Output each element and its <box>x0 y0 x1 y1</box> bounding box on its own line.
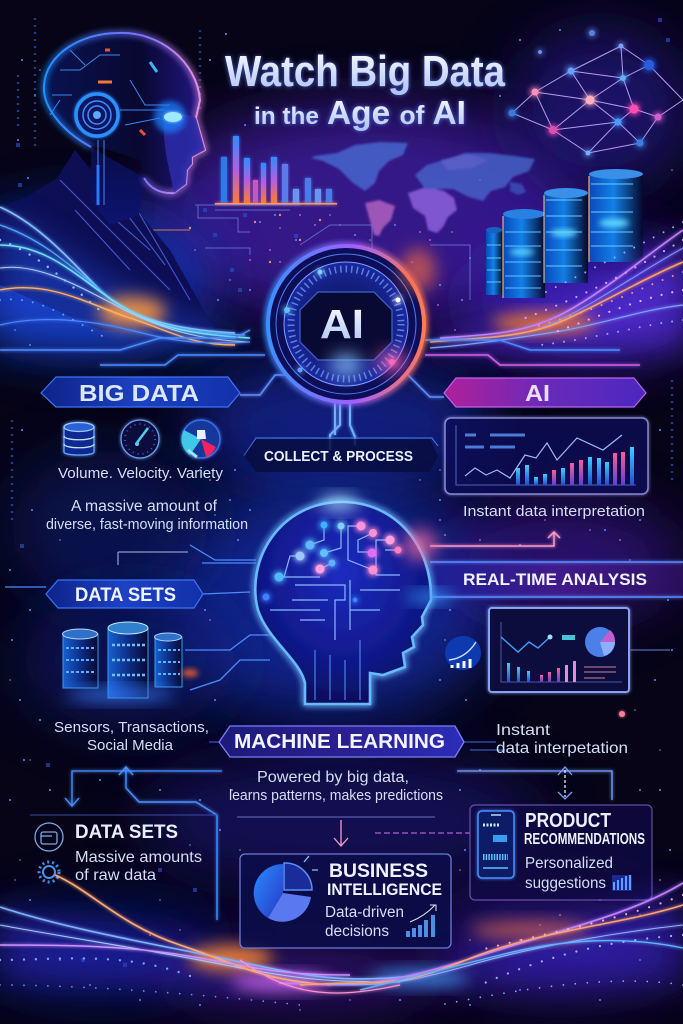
banner: AI <box>444 378 646 407</box>
text: sensors: Social Media <box>87 737 174 754</box>
banner: Big Data: BIG DATA <box>79 380 199 406</box>
server 2 <box>544 188 588 283</box>
eye <box>154 101 186 133</box>
server 3 <box>503 209 545 298</box>
lower flowing light waves <box>0 875 683 1005</box>
icon: database trio <box>62 622 182 698</box>
dotted particle rows <box>0 222 683 345</box>
chip core <box>300 292 392 360</box>
circuit traces under bar chart <box>150 205 470 300</box>
icon: gauge <box>121 420 159 458</box>
arrow: to product recommendations <box>457 767 612 800</box>
icon: gear <box>39 862 59 882</box>
small growth chart badge <box>445 636 481 670</box>
circuit lines on skull <box>50 50 170 205</box>
text: instant interpretation: Instant data interpretation <box>463 503 645 520</box>
banner: Data Sets: DATA SETS <box>75 585 176 606</box>
server 4 <box>486 227 503 295</box>
dashboard bars <box>507 661 576 682</box>
left data streams <box>12 18 672 520</box>
panel: business intelligence: Data-driven <box>325 904 404 921</box>
brain connector traces <box>5 545 275 690</box>
red accent streak <box>540 711 640 717</box>
head <box>44 33 205 193</box>
chip nodes <box>284 270 400 372</box>
text: sensors: Sensors, Transactions, <box>54 719 209 736</box>
dotted particle rows <box>0 895 683 1005</box>
icon: storage badge <box>35 823 63 851</box>
text: machine learning description: Powered by big data, <box>257 769 409 786</box>
panel: business intelligence: decisions <box>325 923 389 940</box>
panel: product recommendations: suggestions <box>525 875 606 892</box>
server stack <box>486 169 643 298</box>
brain nodes <box>262 522 402 602</box>
text: big data description: diverse, fast-moving information <box>46 516 248 533</box>
band: real-time analysis <box>430 562 683 597</box>
icon: mini bars <box>612 875 632 891</box>
banner: AI: AI <box>525 380 550 406</box>
arrow: up to AI <box>430 532 560 546</box>
brain head <box>255 502 431 704</box>
android figure <box>0 33 215 330</box>
connector: chip to brain <box>338 473 340 505</box>
text: instant data interpetation: data interpetation <box>496 740 628 757</box>
panel: data sets: of raw data <box>75 867 156 884</box>
panel: collect and process <box>244 438 438 473</box>
panel: business intelligence: INTELLIGENCE <box>327 880 442 899</box>
cylinder middle <box>108 622 148 698</box>
dashboard line <box>501 637 550 652</box>
text: instant data interpetation: Instant <box>496 722 551 739</box>
head rim light <box>44 33 205 193</box>
panel: product recommendations <box>470 805 652 900</box>
panel: real-time dashboard <box>489 608 629 692</box>
text: three Vs: Volume. Velocity. Variety <box>58 465 224 482</box>
banner: Data Sets <box>46 580 203 608</box>
panel: data sets <box>30 815 217 884</box>
title <box>225 47 505 131</box>
chip label: AI <box>320 301 364 347</box>
banner: Big Data <box>41 377 240 407</box>
neck <box>91 147 144 225</box>
haze under waves <box>0 215 235 350</box>
icon: growth bars <box>408 905 436 937</box>
title line 2: in the Age of AI <box>254 94 466 131</box>
band: real-time analysis: REAL-TIME ANALYSIS <box>463 570 647 589</box>
text: machine learning description: learns patterns, makes predictions <box>229 788 443 804</box>
chart labels <box>465 435 525 447</box>
text: big data description <box>46 498 248 533</box>
server 1 <box>589 169 643 262</box>
panel: AI analytics chart <box>445 418 648 494</box>
arrow: up from data sets panel <box>119 767 217 920</box>
network graph <box>508 30 683 156</box>
world map <box>311 142 535 236</box>
upper flowing light waves <box>0 207 683 350</box>
brain traces <box>270 525 400 700</box>
bar chart <box>215 136 337 204</box>
text: sensors <box>54 719 209 754</box>
chart bars <box>516 447 634 485</box>
icon: phone <box>478 811 514 878</box>
panel: data sets: Massive amounts <box>75 849 202 866</box>
banner: Machine Learning <box>209 726 505 757</box>
arrow: down to data sets <box>65 771 222 806</box>
icon: database <box>64 422 94 455</box>
chart line <box>465 435 622 478</box>
text: machine learning description <box>229 769 443 804</box>
icon: variety pie <box>182 420 220 458</box>
cylinder right <box>154 633 182 687</box>
text: big data description: A massive amount of <box>71 498 218 515</box>
banner: Machine Learning: MACHINE LEARNING <box>234 731 445 753</box>
dashboard pie <box>585 627 615 657</box>
panel: business intelligence: BUSINESS <box>329 861 428 882</box>
panel: product recommendations: PRODUCT <box>525 810 611 832</box>
arrow: down to business intelligence <box>237 817 470 846</box>
panel: data sets: DATA SETS <box>75 822 178 843</box>
panel: business intelligence <box>240 854 451 948</box>
title line 1: Watch Big Data <box>225 47 505 96</box>
ear ring <box>76 94 118 136</box>
AI chip <box>268 246 424 402</box>
icon: pie chart <box>254 856 318 922</box>
shoulders <box>0 150 215 330</box>
cylinder left <box>62 629 98 688</box>
text: instant data interpetation <box>496 722 628 757</box>
panel: collect and process: COLLECT & PROCESS <box>264 449 413 465</box>
circuit traces around AI chip <box>0 330 640 450</box>
panel: product recommendations: Personalized <box>525 855 613 872</box>
face highlight <box>164 108 205 193</box>
